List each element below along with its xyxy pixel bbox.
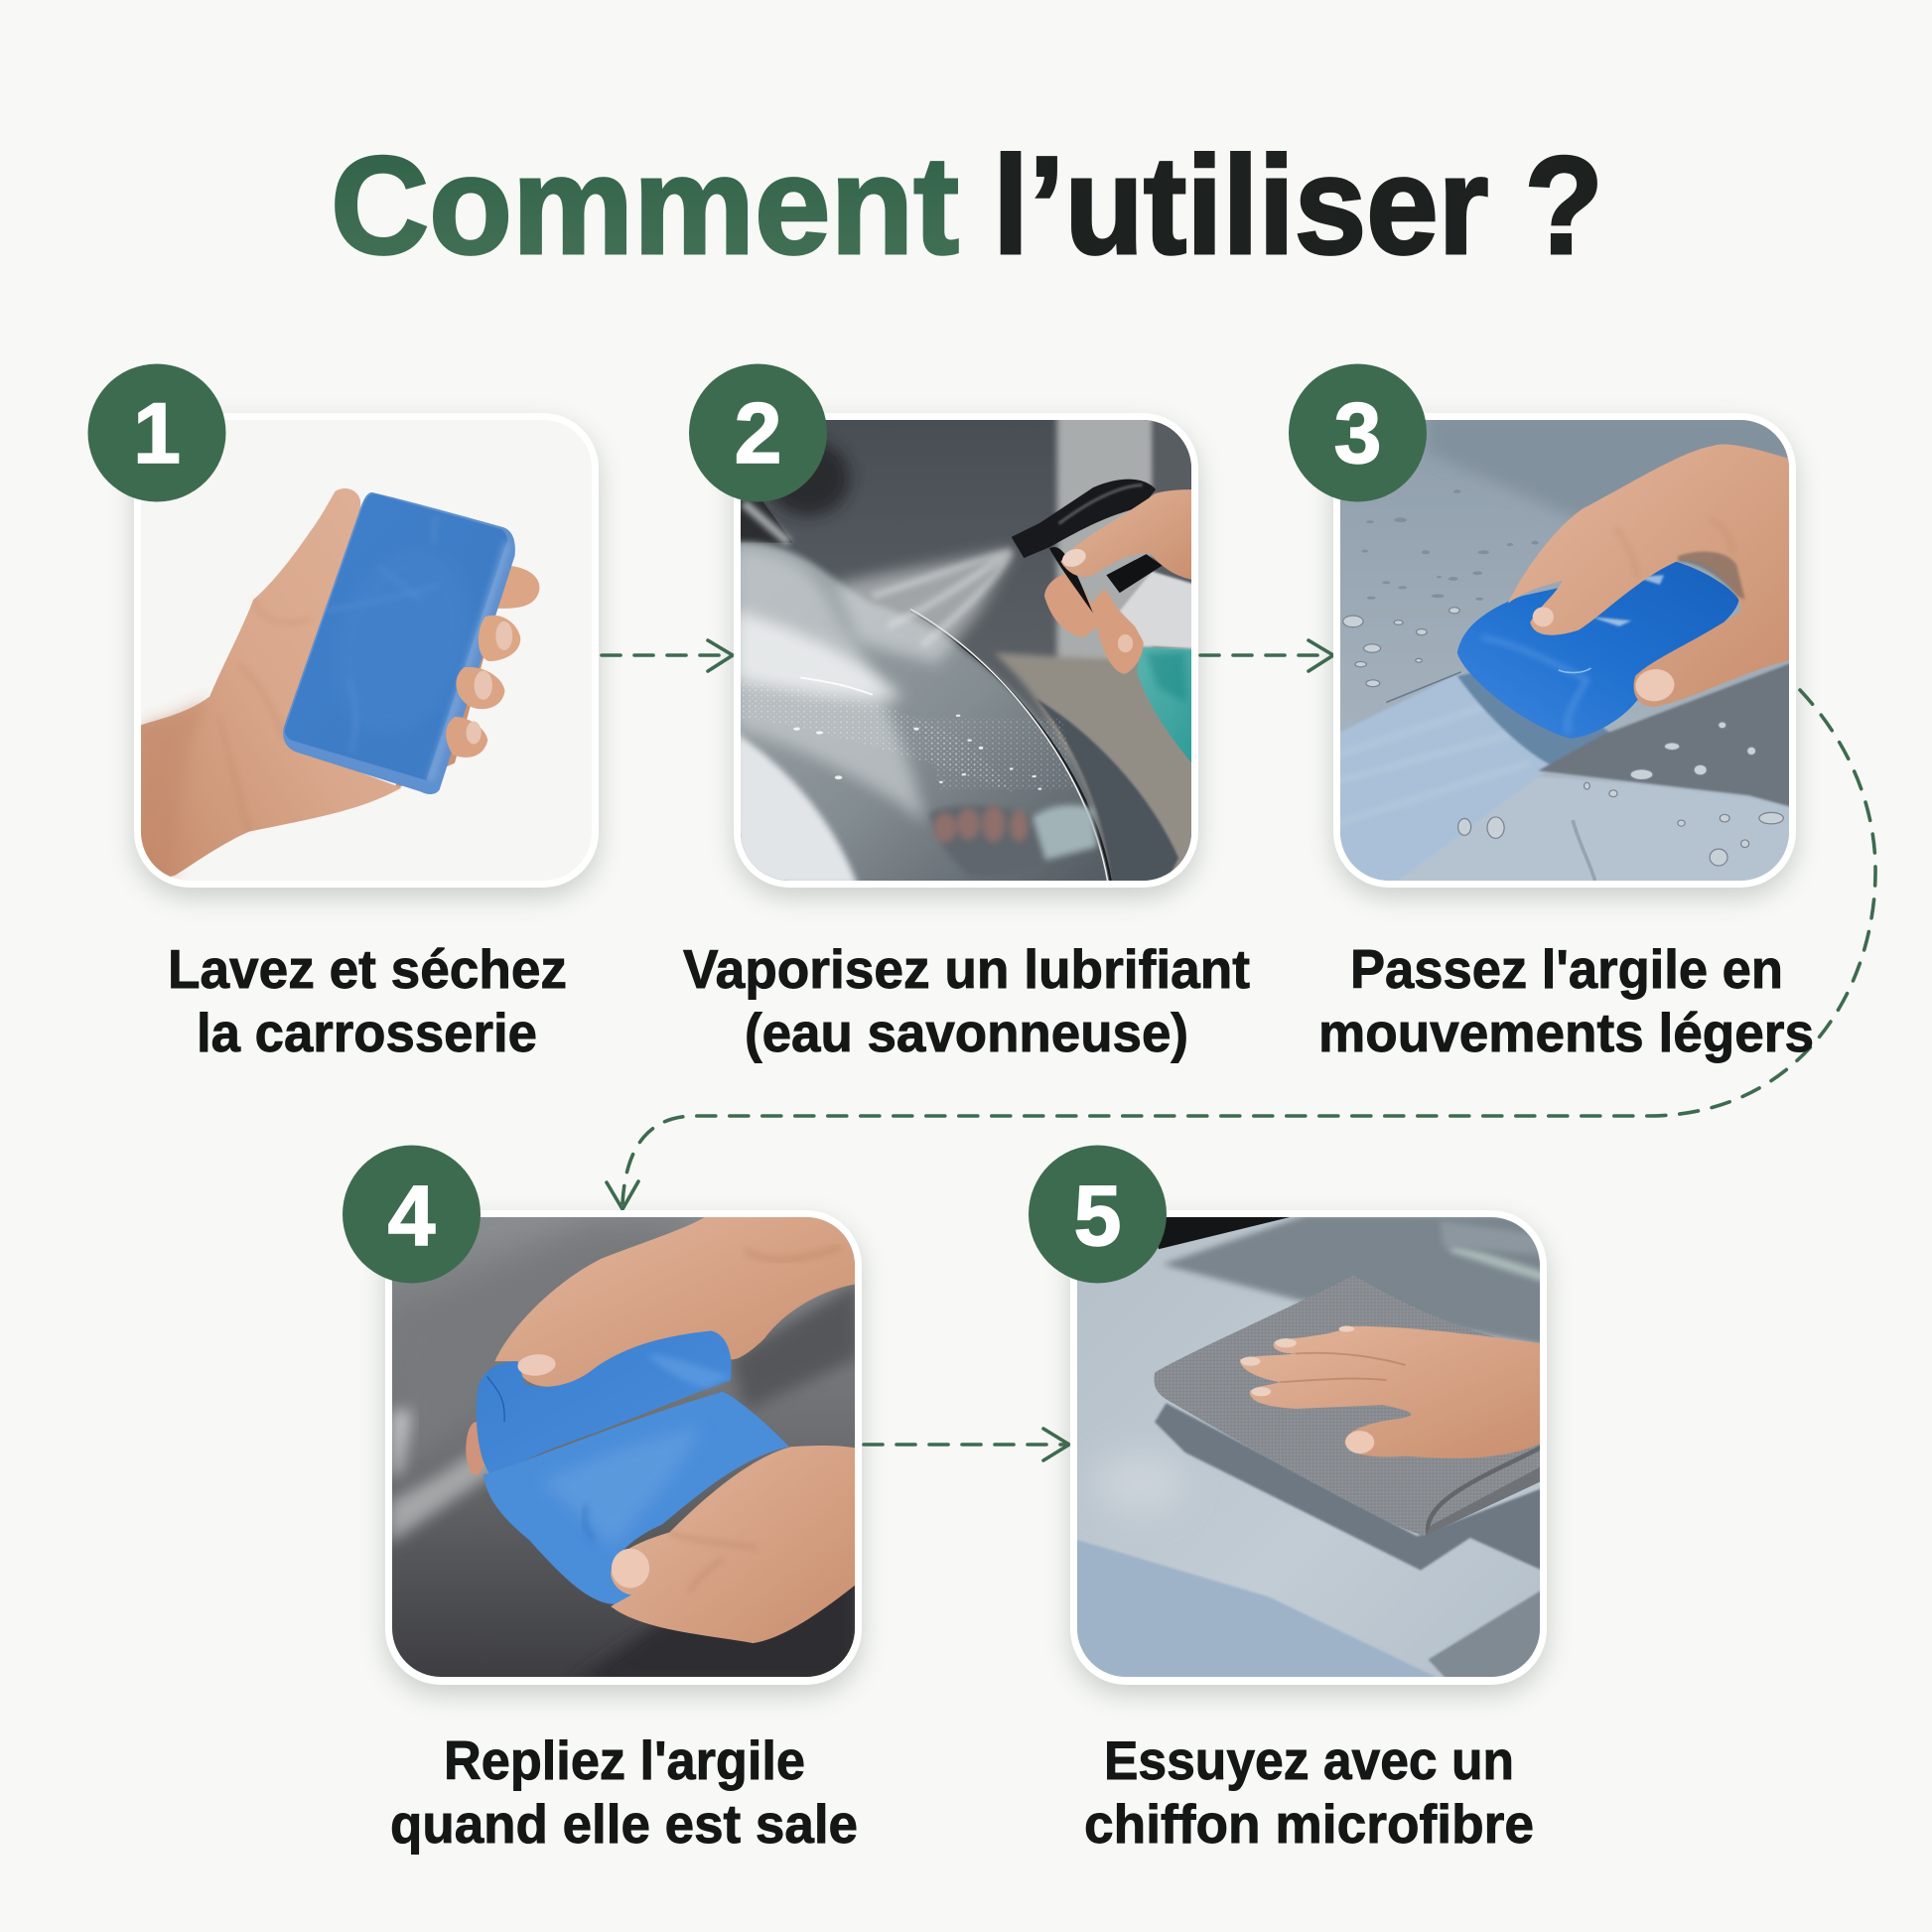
badge: number 3 xyxy=(1289,363,1427,502)
panel: step 1 xyxy=(87,363,599,897)
caption: step 4 xyxy=(390,1729,858,1855)
badge: number 1: 1 xyxy=(133,386,181,482)
badge: number 4: 4 xyxy=(388,1169,436,1264)
caption: step 5 xyxy=(1084,1729,1534,1855)
caption: step 4: quand elle est sale xyxy=(390,1793,858,1855)
arrow: step 2 to step 3 xyxy=(1200,640,1333,671)
photo: wiping hood with microfibre cloth xyxy=(1071,1215,1546,1684)
badge: number 1 xyxy=(87,363,226,502)
badge: number 2 xyxy=(689,363,827,502)
caption: step 3: mouvements légers xyxy=(1318,1002,1814,1063)
caption: step 1: Lavez et séchez xyxy=(168,938,567,1000)
panel: step 3 xyxy=(1289,363,1798,897)
caption: step 1 xyxy=(168,938,567,1063)
badge: number 3: 3 xyxy=(1334,386,1381,482)
badge: number 5 xyxy=(1029,1146,1167,1283)
panel: step 2 xyxy=(689,363,1199,897)
photo: rubbing clay on wet car xyxy=(1335,414,1798,885)
panel: step 5 xyxy=(1029,1146,1547,1695)
caption: step 4: Repliez l'argile xyxy=(444,1729,805,1791)
caption: step 5: chiffon microfibre xyxy=(1084,1793,1534,1855)
caption: step 2: (eau savonneuse) xyxy=(745,1002,1188,1063)
title xyxy=(331,127,1603,283)
badge: number 5: 5 xyxy=(1074,1169,1121,1264)
caption: step 1: la carrosserie xyxy=(197,1002,537,1063)
badge: number 4 xyxy=(343,1146,481,1283)
photo: hand holding clay bar xyxy=(141,420,592,885)
arrow: curved connector from step 3 to step 4 xyxy=(607,690,1875,1209)
caption: step 2 xyxy=(683,938,1250,1063)
caption: step 2: Vaporisez un lubrifiant xyxy=(683,938,1250,1000)
photo: folding the clay between hands xyxy=(388,1215,860,1684)
caption: step 3: Passez l'argile en xyxy=(1350,938,1783,1000)
arrow: step 1 to step 2 xyxy=(602,640,733,671)
title: l’utiliser ? xyxy=(993,127,1603,283)
caption: step 3 xyxy=(1318,938,1814,1063)
caption: step 5: Essuyez avec un xyxy=(1104,1729,1514,1791)
panel: step 4 xyxy=(343,1146,862,1695)
title: Comment xyxy=(331,127,959,283)
arrow: step 4 to step 5 xyxy=(864,1429,1069,1460)
badge: number 2: 2 xyxy=(735,386,781,482)
photo: spraying lubricant on car xyxy=(736,414,1199,885)
